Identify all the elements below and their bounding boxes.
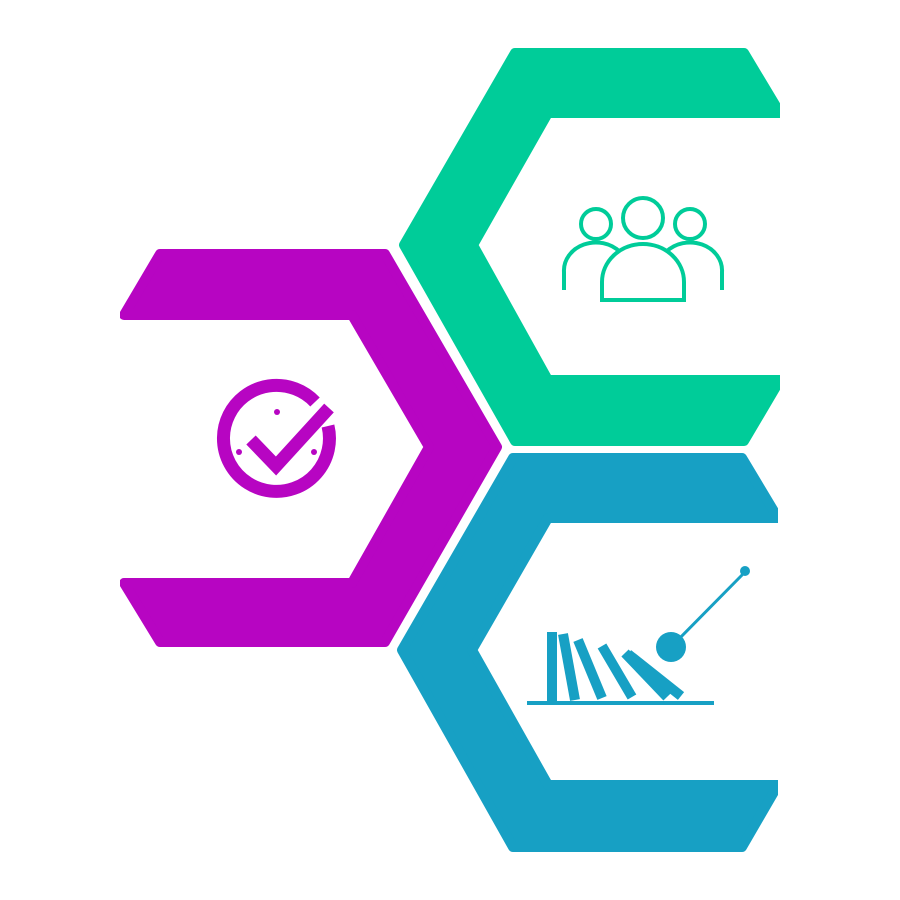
panel: blue hexagon bracket xyxy=(402,445,798,865)
panel: purple hexagon bracket xyxy=(110,240,497,660)
panel: green hexagon bracket xyxy=(404,40,800,460)
icon: falling dominoes xyxy=(527,566,750,705)
icon: clock with check xyxy=(223,385,329,491)
icon: group of people xyxy=(564,198,722,300)
